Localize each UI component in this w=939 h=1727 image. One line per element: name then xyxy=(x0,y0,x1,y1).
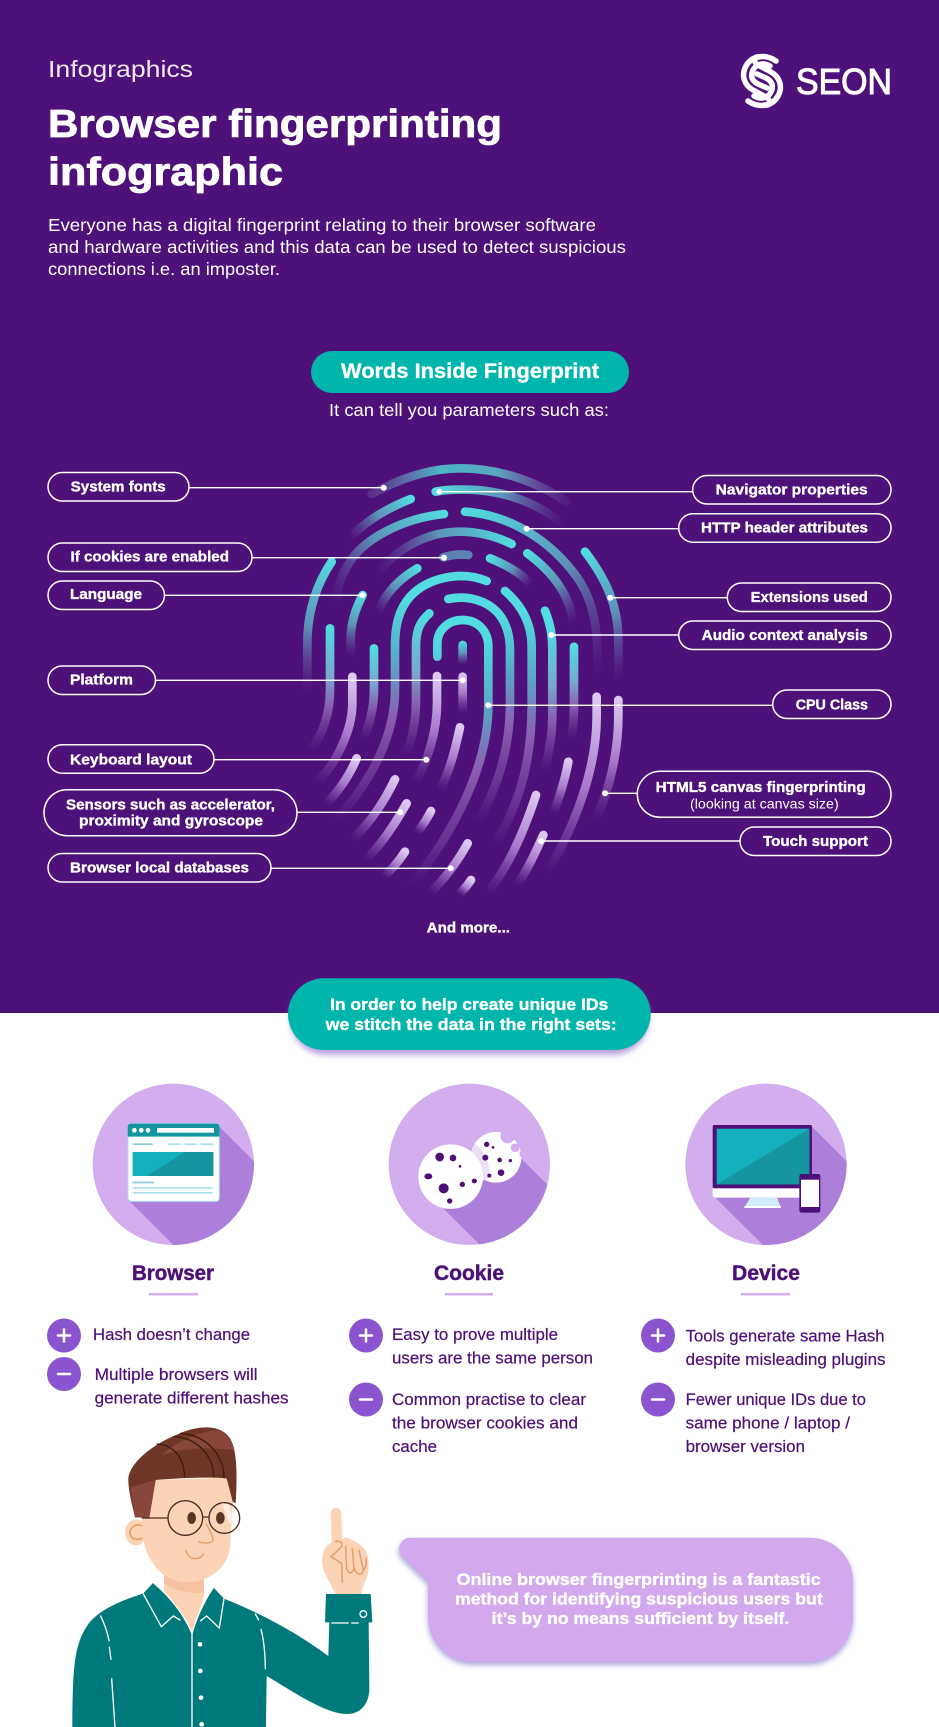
callout: speech bubble: method for identifying suspicious users but xyxy=(455,1589,823,1608)
list: device minus point: same phone / laptop / xyxy=(686,1415,850,1433)
hand xyxy=(322,1508,369,1594)
icon: cookies xyxy=(388,1084,550,1245)
callout: unique IDs pill xyxy=(288,978,651,1055)
heading pill: Words Inside Fingerprint xyxy=(311,351,629,393)
heading: Cookie: Cookie xyxy=(434,1262,504,1285)
label: Language: Language xyxy=(70,587,142,603)
list: browser minus point xyxy=(47,1357,289,1408)
list: device plus point: Tools generate same Hash xyxy=(686,1328,885,1346)
label: Touch support: Touch support xyxy=(763,834,868,850)
label: CPU Class: CPU Class xyxy=(796,697,868,713)
list: device minus point xyxy=(641,1382,866,1456)
icon: browser window xyxy=(92,1084,254,1245)
eyebrow: Infographics: Infographics xyxy=(48,56,193,82)
list: cookie plus point: users are the same person xyxy=(392,1350,593,1368)
heading: Cookie xyxy=(434,1262,504,1296)
head xyxy=(125,1519,147,1545)
callout: unique IDs pill: In order to help create unique IDs xyxy=(330,995,608,1014)
intro text block: and hardware activities and this data can be used to detect suspicious xyxy=(48,237,626,257)
neck xyxy=(164,1567,204,1633)
intro text block: Everyone has a digital fingerprint relating to their browser software xyxy=(48,215,596,235)
callout: unique IDs pill: we stitch the data in the right sets: xyxy=(325,1015,617,1034)
panel: purple header background xyxy=(0,0,939,1013)
list: cookie minus point xyxy=(349,1382,587,1456)
label: HTML5 canvas fingerprinting: (looking at canvas size) xyxy=(690,796,839,811)
label: HTML5 canvas fingerprinting xyxy=(602,771,891,817)
label: Keyboard layout: Keyboard layout xyxy=(70,753,192,769)
list: browser plus point xyxy=(47,1318,250,1352)
heading: Device xyxy=(732,1262,800,1296)
label: Platform xyxy=(48,666,466,694)
intro text block: connections i.e. an imposter. xyxy=(48,259,280,279)
cuff xyxy=(325,1594,372,1622)
title: Browser fingerprinting xyxy=(48,103,502,146)
label: Sensors: Sensors such as accelerator, xyxy=(66,797,275,813)
chart: fingerprint illustration xyxy=(307,468,618,893)
label: Language xyxy=(48,581,366,610)
title: infographic xyxy=(48,151,283,194)
list: browser minus point: Multiple browsers will xyxy=(95,1366,258,1384)
label: Browser local databases: Browser local databases xyxy=(70,861,249,877)
heading: Browser: Browser xyxy=(132,1262,214,1285)
icon: desktop and phone xyxy=(685,1084,847,1245)
label: System fonts xyxy=(48,472,387,501)
label: Extensions used: Extensions used xyxy=(751,590,868,606)
label: Platform: Platform xyxy=(70,673,133,689)
label: If cookies are enabled: If cookies are enabled xyxy=(70,550,229,566)
callout: speech bubble xyxy=(399,1538,853,1665)
label: System fonts: System fonts xyxy=(71,480,166,496)
list: device minus point: Fewer unique IDs due to xyxy=(686,1391,866,1409)
label: Navigator properties xyxy=(436,476,891,504)
label: Browser local databases xyxy=(48,854,454,882)
label: HTTP header attributes: HTTP header attributes xyxy=(701,521,868,537)
label: If cookies are enabled xyxy=(48,543,447,572)
hair xyxy=(128,1427,237,1517)
shirt details xyxy=(101,1583,265,1727)
subheading: It can tell you parameters such as: xyxy=(329,400,609,420)
callout: speech bubble: it’s by no means sufficient by itself. xyxy=(492,1609,789,1628)
callout: speech bubble: Online browser fingerprinting is a fantastic xyxy=(457,1570,821,1589)
label: HTML5 canvas fingerprinting: HTML5 canvas fingerprinting xyxy=(656,780,866,796)
list: cookie minus point: Common practise to clear xyxy=(392,1391,587,1409)
text: And more: And more... xyxy=(427,921,510,937)
icon: SEON mark xyxy=(744,57,780,105)
logo: SEON: SEON xyxy=(796,61,892,102)
label: Navigator properties: Navigator properties xyxy=(716,483,868,499)
label: Sensors: proximity and gyroscope xyxy=(79,813,263,829)
label: Audio context analysis xyxy=(548,621,891,650)
list: browser minus point: generate different hashes xyxy=(95,1390,289,1408)
list: cookie plus point xyxy=(349,1318,593,1368)
label: Audio context analysis: Audio context analysis xyxy=(702,628,868,644)
list: device minus point: browser version xyxy=(686,1438,805,1456)
label: Touch support xyxy=(538,827,891,856)
glasses xyxy=(142,1501,240,1535)
eyes xyxy=(187,1512,225,1524)
title xyxy=(48,103,502,194)
shirt xyxy=(72,1583,369,1727)
list: cookie minus point: the browser cookies and xyxy=(392,1415,578,1433)
illustration: man pointing up xyxy=(72,1427,372,1727)
heading: Browser xyxy=(132,1262,214,1296)
list: device plus point: despite misleading plugins xyxy=(686,1351,886,1369)
intro text block xyxy=(48,215,626,279)
label: Extensions used xyxy=(607,583,891,612)
list: cookie minus point: cache xyxy=(392,1438,437,1456)
label: HTTP header attributes xyxy=(524,514,891,542)
heading pill: Words Inside Fingerprint: Words Inside Fingerprint xyxy=(341,360,599,383)
label: Sensors xyxy=(44,790,403,836)
label: CPU Class xyxy=(485,690,891,718)
list: browser plus point: Hash doesn’t change xyxy=(93,1326,250,1344)
label: Keyboard layout xyxy=(48,745,429,773)
list: device plus point xyxy=(641,1318,886,1369)
list: cookie plus point: Easy to prove multiple xyxy=(392,1326,558,1344)
logo: SEON xyxy=(744,57,892,105)
heading: Device: Device xyxy=(732,1262,800,1285)
